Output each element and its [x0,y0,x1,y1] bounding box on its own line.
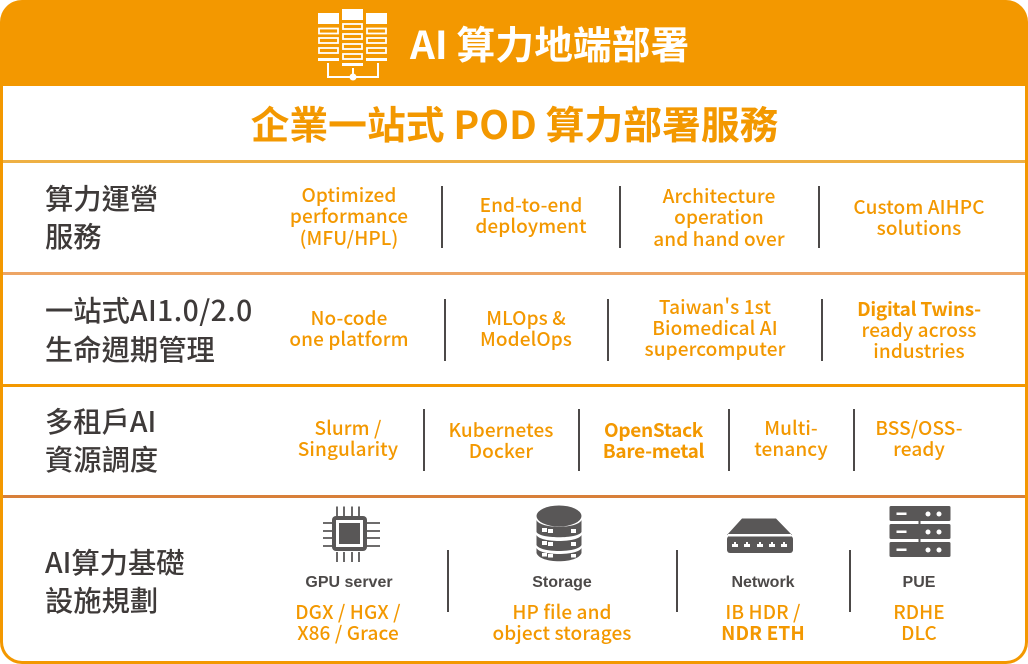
item: kubernetes [448,416,554,464]
row heading: 設施規劃 [45,579,158,620]
label: Network: Network [731,574,795,590]
item: network list: NDR ETH [721,619,805,646]
item: optimized performance [290,181,408,251]
row heading: 多租戶AI [45,400,156,440]
item: digital twins: ready across [862,316,976,343]
item: BSS/OSS [875,414,963,462]
item: end-to-end deployment [475,191,587,239]
item: openstack: OpenStack [604,416,703,443]
item: GPU list: DGX / HGX / [295,598,401,625]
row heading: 算力運營 [45,176,158,218]
icon: PUE servers [890,506,950,557]
label: GPU server: GPU server [305,574,393,590]
item: end-to-end deployment: deployment [475,212,587,239]
item: custom AIHPC [853,192,985,241]
row heading [45,400,158,479]
panel: 多租戶AI資源調度 [45,400,963,479]
item: no-code: one platform [289,325,409,352]
item: end-to-end deployment: End-to-end [480,191,582,218]
item: no-code [289,304,409,352]
item: digital twins: industries [873,337,965,364]
icon: server racks [318,9,387,80]
item: optimized performance: performance [290,202,408,229]
row heading [45,289,253,368]
row heading [45,176,158,256]
label: Storage: Storage [532,574,592,590]
item: digital twins [857,294,981,364]
icon: GPU chip [323,506,380,562]
panel: 一站式AI生命週期管理 [45,289,981,368]
item: GPU list [295,598,401,646]
item: openstack [603,416,704,464]
row heading: 服務 [45,215,102,256]
icon: network switch [727,518,793,553]
item: architecture operation: operation [674,203,764,230]
item: multi-tenancy: Multi- [764,414,818,441]
item: storage list [492,598,632,646]
item: kubernetes: Docker [469,437,533,464]
item: biomedical supercomputer: Taiwan's 1st [659,292,771,320]
row heading: 生命週期管理 [45,328,215,368]
panel: 算力運營服務 [45,176,985,256]
item: no-code: No-code [311,304,387,330]
item: digital twins: Digital Twins- [857,294,981,322]
item: storage list: object storages [492,619,632,646]
item: optimized performance: (MFU/HPL) [300,224,398,251]
item: slurm: Singularity [298,435,398,462]
row heading: AI算力基礎 [45,540,185,582]
item: storage list: HP file and [512,598,612,625]
icon: storage [536,506,582,562]
item: BSS/OSS: BSS/OSS- [875,414,963,441]
item: MLOps [480,304,572,352]
item: network list [721,598,805,646]
title: AI 算力地端部署 [410,15,689,71]
item: MLOps: ModelOps [480,325,572,352]
row heading: 一站式AI1.0/2.0 [45,289,253,330]
item: network list: IB HDR / [725,598,801,625]
item: BSS/OSS: ready [893,435,945,462]
item: biomedical supercomputer: Biomedical AI [652,314,778,341]
item: multi-tenancy: tenancy [754,435,828,462]
item: cooling list: RDHE [893,598,945,625]
item: cooling list [893,598,945,646]
row heading [45,540,185,620]
item: biomedical supercomputer: supercomputer [645,335,785,362]
label: PUE: PUE [903,574,935,590]
header band [0,0,1028,86]
item: MLOps: MLOps & [486,304,566,330]
item: slurm [298,414,398,462]
item: custom AIHPC: Custom AIHPC [853,192,985,220]
item: openstack: Bare-metal [603,437,704,464]
item: architecture operation: Architecture [663,182,775,209]
item: multi-tenancy [754,414,828,462]
row heading: 資源調度 [45,438,158,479]
item: architecture operation: and hand over [653,225,785,252]
item: slurm: Slurm / [314,414,382,441]
item: GPU list: X86 / Grace [297,619,399,646]
subtitle: 企業一站式 POD 算力部署服務 [251,95,778,151]
item: custom AIHPC: solutions [877,214,961,241]
item: biomedical supercomputer [645,292,786,362]
item: optimized performance: Optimized [301,181,396,208]
panel: AI算力基礎設施規劃 [45,506,950,646]
item: architecture operation [653,182,785,252]
item: kubernetes: Kubernetes [448,416,554,443]
item: cooling list: DLC [901,619,937,646]
